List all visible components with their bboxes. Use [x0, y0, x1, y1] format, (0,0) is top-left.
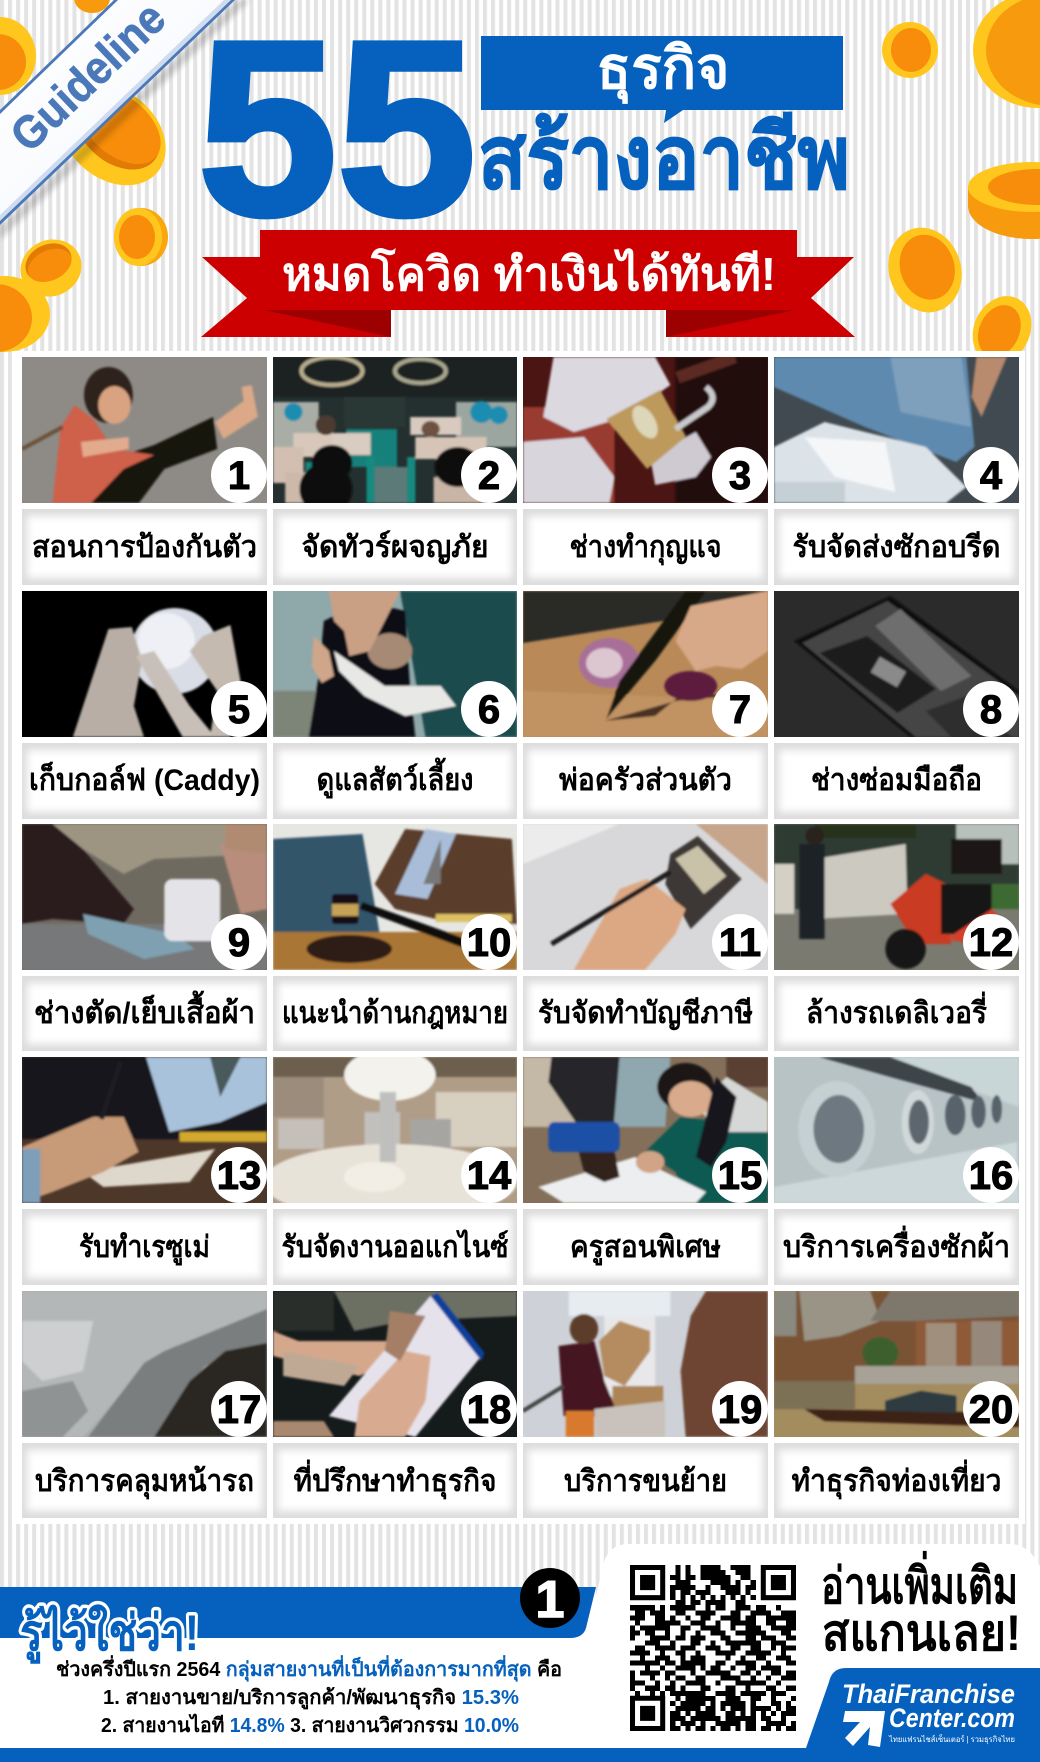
badge 14: 14 [467, 1154, 512, 1198]
card 3 [523, 351, 768, 585]
label 9 [22, 976, 267, 1051]
label 16: บริการเครื่องซักผ้า [783, 1225, 1010, 1264]
title: สร้างอาชีพ: สร้างอาชีพ [478, 108, 850, 207]
coin: right bottom [962, 286, 1040, 374]
fact text: 2. สายงานไอที 14.8% 3. สายงานวิศวกรรม 10.0% [101, 1713, 519, 1737]
badge 11 [712, 914, 768, 970]
card 17 [22, 1291, 267, 1518]
badge 2: 2 [478, 454, 500, 498]
label 9: ช่างตัด/เย็บเสื้อผ้า [34, 990, 255, 1030]
coin: under banner [40, 64, 186, 206]
card 1 [22, 357, 267, 585]
icon: arrow [843, 1711, 885, 1747]
label 10 [273, 976, 517, 1051]
photo 19: moving service [523, 1291, 768, 1437]
card 19 [523, 1291, 768, 1518]
label 15 [523, 1209, 768, 1285]
photo 10: gavel and lawyer [273, 824, 517, 970]
photo 4: laundry delivery [774, 357, 1019, 503]
card 5 [22, 591, 267, 819]
badge 16 [963, 1147, 1019, 1203]
number 1 circle: 1 [536, 1571, 564, 1629]
label 18: ที่ปรึกษาทำธุรกิจ [294, 1459, 496, 1500]
fact text [56, 1654, 562, 1737]
badge 7 [712, 681, 768, 737]
badge 16: 16 [969, 1154, 1013, 1198]
badge 1: 1 [228, 454, 250, 498]
label 14: รับจัดงานออแกไนซ์ [282, 1229, 508, 1264]
label 6: ดูแลสัตว์เลี้ยง [316, 757, 474, 799]
number 1 circle [520, 1568, 580, 1629]
photo 12: car wash and scooter [774, 824, 1019, 970]
photo 7: chef cutting onion [523, 591, 768, 737]
label 17: บริการคลุมหน้ารถ [35, 1465, 254, 1500]
footer blue ribbon [0, 1587, 596, 1638]
photo 13: writing a resume [22, 1057, 267, 1203]
label 12: ล้างรถเดลิเวอรี่ [806, 991, 987, 1030]
label 4 [774, 509, 1019, 585]
badge 5 [211, 681, 267, 737]
badge 10 [461, 914, 517, 970]
label 16 [774, 1209, 1019, 1285]
card 11 [523, 824, 768, 1051]
label 20: ทำธุรกิจท่องเที่ยว [792, 1459, 1002, 1500]
logo: ThaiFranchise Center.com: ThaiFranchise [842, 1679, 1015, 1709]
title box: ธุรกิจ: ธุรกิจ [596, 36, 730, 105]
badge 4 [963, 447, 1019, 503]
label 11: รับจัดทำบัญชีภาษี [538, 997, 753, 1031]
coin: top right small [882, 22, 938, 78]
card 20 [774, 1291, 1019, 1518]
card 15 [523, 1057, 768, 1285]
badge 17 [211, 1381, 267, 1437]
coin: top corner [74, 0, 110, 13]
card 14 [263, 1049, 517, 1285]
label 2: จัดทัวร์ผจญภัย [302, 530, 488, 565]
label 1: สอนการป้องกันตัว [32, 531, 257, 564]
coin: right middle [968, 162, 1040, 239]
photo 2: tour bus interior [273, 357, 517, 503]
logo: ThaiFranchise Center.com: ไทยแฟรนไชส์เซ็นเตอร์ | รวมธุรกิจไทย [888, 1734, 1015, 1744]
coin: top right big [973, 0, 1040, 108]
badge 2 [461, 447, 517, 503]
badge 19: 19 [718, 1388, 762, 1432]
photo 8: open smartphone [774, 591, 1019, 737]
photo 16: washing machines [774, 1057, 1019, 1203]
label 2 [273, 509, 517, 585]
coin: left middle [11, 230, 91, 306]
label 20 [774, 1443, 1019, 1518]
badge 13 [211, 1147, 267, 1203]
coin: bottom left [0, 276, 50, 352]
photo 5: golf ball and gloves [22, 591, 267, 737]
label 5 [22, 743, 267, 819]
photo 3: locksmith [523, 357, 768, 503]
label 18 [273, 1443, 517, 1518]
badge 18: 18 [467, 1388, 511, 1432]
label 12 [774, 976, 1019, 1051]
photo 9: sewing machine [22, 824, 267, 970]
photo 1: girl kicking [22, 357, 267, 503]
badge 10: 10 [467, 921, 511, 965]
fact text: 1. สายงานขาย/บริการลูกค้า/พัฒนาธุรกิจ 15.3% [103, 1686, 519, 1711]
scan call to action [821, 1551, 1021, 1661]
label 3 [523, 509, 768, 585]
badge 6: 6 [478, 688, 500, 732]
card 16 [774, 1057, 1019, 1285]
card 13 [22, 1057, 267, 1285]
photo 6: petting a dog [273, 591, 517, 737]
badge 15 [712, 1147, 768, 1203]
coin: top left edge [0, 17, 36, 95]
card 8 [774, 591, 1019, 819]
card 4 [774, 357, 1019, 585]
badge 12 [963, 914, 1019, 970]
badge 17: 17 [217, 1388, 261, 1432]
card 6 [273, 591, 517, 819]
card 2 [273, 357, 517, 585]
badge 18 [461, 1381, 517, 1437]
label 8: ช่างซ่อมมือถือ [811, 764, 982, 797]
label 8 [774, 743, 1019, 819]
badge 4: 4 [980, 454, 1003, 498]
badge 12: 12 [969, 921, 1013, 965]
title box: ธุรกิจ [481, 36, 843, 123]
fact text: ช่วงครึ่งปีแรก 2564 กลุ่มสายงานที่เป็นที่ต้องการมากที่สุด คือ [56, 1654, 562, 1682]
label 7 [523, 743, 768, 819]
logo: ThaiFranchise Center.com: Center.com [889, 1703, 1015, 1733]
card 9 [22, 824, 267, 1051]
label 14 [273, 1209, 517, 1285]
photo 20: floating market [774, 1291, 1019, 1437]
badge 7: 7 [729, 688, 751, 732]
badge 3: 3 [729, 454, 751, 498]
label 10: แนะนำด้านกฎหมาย [282, 997, 508, 1030]
label 19 [523, 1443, 768, 1518]
badge 20 [963, 1381, 1019, 1437]
white grid panel [12, 351, 1025, 1524]
badge 9: 9 [228, 921, 250, 965]
badge 5: 5 [228, 688, 250, 732]
heading: รู้ไว้ใช่ว่า: รู้ไว้ใช่ว่า! [20, 1604, 199, 1664]
photo 14: wedding table [273, 1057, 517, 1203]
badge 19 [712, 1381, 768, 1437]
badge 3 [712, 447, 768, 503]
scan call to action: สแกนเลย! [822, 1605, 1021, 1661]
label 15: ครูสอนพิเศษ [570, 1231, 721, 1266]
footer bottom band [0, 1748, 1040, 1762]
logo: ThaiFranchise Center.com [806, 1668, 1040, 1748]
badge 8: 8 [980, 688, 1002, 732]
photo 18: business consultant [273, 1291, 517, 1437]
badge 11: 11 [719, 921, 761, 965]
badge 15: 15 [718, 1154, 762, 1198]
card 18 [273, 1291, 517, 1518]
photo 11: calculator [523, 824, 768, 970]
label 19: บริการขนย้าย [564, 1465, 727, 1498]
coin: small left [114, 208, 168, 266]
label 17 [22, 1443, 267, 1518]
badge 1 [211, 447, 267, 503]
label 6 [273, 743, 517, 819]
red ribbon [201, 230, 855, 337]
label 11 [523, 976, 768, 1051]
badge 13: 13 [217, 1154, 261, 1198]
label 13: รับทำเรซูเม่ [79, 1231, 210, 1266]
badge 20: 20 [969, 1388, 1013, 1432]
label 5: เก็บกอล์ฟ (Caddy) [29, 761, 260, 797]
label 3: ช่างทำกุญแจ [570, 531, 722, 566]
label 4: รับจัดส่งซักอบรีด [792, 531, 1000, 564]
badge 8 [963, 681, 1019, 737]
photo 15: private tutor [523, 1057, 768, 1203]
QR code [630, 1565, 796, 1731]
badge 14 [461, 1147, 517, 1203]
label 7: พ่อครัวส่วนตัว [559, 764, 732, 797]
coin: right lower [877, 218, 973, 322]
photo 17: car cover [22, 1291, 267, 1437]
badge 9 [211, 914, 267, 970]
footer white area [0, 1544, 1040, 1748]
label 1 [22, 509, 267, 585]
card 10 [273, 824, 517, 1051]
card 7 [523, 591, 768, 819]
card 12 [774, 824, 1019, 1051]
badge 6 [461, 681, 517, 737]
corner banner: Guideline [0, 0, 250, 240]
red ribbon: หมดโควิด ทำเงินได้ทันที! [282, 247, 776, 300]
label 13 [22, 1209, 267, 1285]
